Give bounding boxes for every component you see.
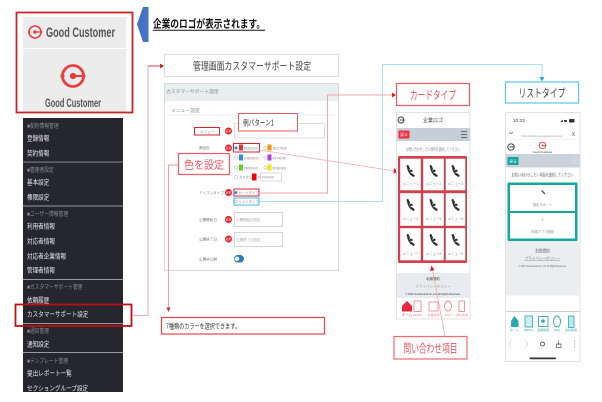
url bar: X (572, 132, 576, 138)
label: list type (506, 82, 578, 103)
note: seven colours: 7種類のカラーを選択できます。 (166, 322, 240, 330)
list menu: Y (541, 218, 544, 222)
side navigation: ■カスタマーサポート管理 (27, 282, 83, 291)
field: colour options: 必須 (226, 146, 232, 150)
callout: set colour (178, 154, 230, 174)
menu grid (398, 156, 467, 263)
bottom nav: 会社情報 (456, 312, 468, 317)
logo wordmark horizontal: Good Customer (46, 24, 115, 40)
footer block: © 2020 Goodsoucell Co.,Ltd. All Rights Reserved. (518, 265, 567, 268)
side navigation: ■テンプレート管理 (27, 356, 69, 365)
field: colour options: FF0000 (262, 176, 274, 180)
field: colour options: #4D9AD2 (244, 156, 259, 160)
field: publish start: 必須 (226, 218, 232, 222)
bottom nav: 会員情報 (537, 327, 549, 332)
menu grid: メニュー3 (448, 182, 463, 186)
icon: logo horizontal (28, 26, 42, 38)
footer block: プライバシーポリシー (525, 256, 561, 260)
menu grid: メニュー5 (426, 217, 441, 221)
bottom nav: 会員情報 (427, 312, 440, 317)
menu grid: メニュー1 (403, 182, 418, 186)
status bar (513, 118, 574, 124)
phone: list type (506, 112, 580, 362)
bottom nav: ホーム (510, 327, 519, 332)
url bar: https://goodcm.sky.goodcustomer.jp (521, 134, 563, 138)
home indicator (530, 358, 556, 359)
side navigation: 契約情報 (27, 148, 50, 158)
field: colour options: #974D9C (272, 156, 287, 160)
list menu: 設定サポート (533, 202, 552, 207)
menu grid: メニュー9 (448, 252, 463, 256)
bottom nav: FAQ (554, 328, 561, 332)
side navigation: 通知設定 (27, 339, 50, 349)
field: icon type: カードタイプ (238, 190, 259, 195)
panel: settings form: メニュー設定 (171, 107, 200, 114)
menu grid: メニュー7 (403, 252, 418, 256)
field: icon type: リストタイプ (238, 199, 259, 204)
callout: pattern example (238, 114, 298, 131)
menu grid: メニュー6 (448, 217, 463, 221)
field: publish start (199, 212, 282, 226)
footer block: 利用規約 (535, 248, 550, 252)
arrow: colour callout to note (166, 165, 178, 312)
field: publish toggle (199, 255, 244, 262)
heading box: admin settings: 管理画面カスタマーサポート設定 (193, 60, 311, 72)
side navigation: 依頼履歴 (27, 295, 50, 305)
arrow: card type option to card label (259, 92, 396, 193)
field: icon type: アイコンタイプ (199, 190, 224, 195)
arrow: list type option to list label (260, 64, 544, 202)
field: publish end: 公開終了日 (199, 236, 217, 242)
field: publish toggle: 公開非公開 (199, 256, 217, 262)
field: publish end: 公開終了日設定... (236, 237, 263, 242)
bottom nav: NEWS (524, 328, 533, 332)
side navigation: ■通知管理 (27, 326, 50, 335)
field: publish end (199, 232, 282, 246)
heading: logo note: 企業のロゴが表示されます。 (153, 16, 265, 30)
label: card type (396, 84, 470, 106)
label: inquiry items: 問い合わせ項目 (404, 342, 458, 356)
list menu (508, 182, 578, 241)
side navigation: 登録情報 (27, 133, 50, 143)
field: publish start: 公開開始日設定... (236, 217, 263, 222)
list menu: 利用アプリ関連 (531, 229, 554, 234)
prompt: お問い合わせしたい項目を選択してください (406, 146, 460, 153)
field: colour options: #EC7A00 (272, 146, 287, 150)
side navigation: ■管理者設定 (27, 165, 54, 174)
field: menu: 必須 (226, 129, 232, 133)
footer block: © 2020 Goodsoucell Co.,Ltd. All Rights Reserved. (406, 292, 461, 296)
logo wordmark stacked: Good Customer (45, 98, 101, 110)
menu grid: メニュー8 (426, 252, 441, 256)
icon: logo stacked (60, 66, 86, 86)
prompt: お問い合わせしたい項目を選択してください (512, 172, 574, 178)
side navigation: ■契約情報管理 (27, 121, 59, 130)
icon: header logo (398, 117, 404, 123)
bottom nav: 会社情報 (565, 327, 577, 332)
bottom nav: NEWS (413, 313, 422, 317)
nav highlight box (16, 304, 132, 326)
field: menu (194, 124, 324, 138)
browser controls (509, 340, 574, 348)
icon: header logos (508, 142, 552, 154)
field: colour options: #F0E000 (272, 166, 286, 170)
field: colour options: 商品色 (199, 145, 210, 150)
menu grid: メニュー4 (403, 217, 418, 221)
footer block (506, 241, 580, 296)
label: card type: カードタイプ (410, 89, 456, 102)
bottom nav: FAQ (445, 313, 452, 317)
callout: pattern example: 例パターン1 (243, 118, 274, 128)
arrow: nav to settings (132, 64, 164, 316)
bottom nav (510, 316, 577, 332)
note: seven colours (162, 318, 324, 334)
side navigation: 利用者情報 (27, 221, 56, 231)
footer block (397, 273, 470, 298)
field: colour options: #E82434 (244, 146, 258, 150)
side navigation: 管理者情報 (27, 265, 56, 275)
footer block: プライバシーポリシー (415, 284, 451, 288)
side navigation: 基本設定 (27, 177, 50, 187)
heading: logo note (153, 16, 265, 30)
field: menu: メニュー (200, 130, 215, 134)
action bar (506, 154, 580, 168)
menu grid: メニュー2 (426, 182, 441, 186)
icon: blue pointer (137, 7, 148, 42)
action bar (397, 128, 470, 141)
panel: settings form (164, 84, 338, 270)
field: icon type (199, 189, 259, 205)
icon: header logos: Good Customer (533, 150, 552, 154)
arrow: colour swatch to card grid (259, 150, 398, 174)
field: colour options: #60D040 (244, 166, 258, 170)
label: inquiry items (394, 336, 467, 359)
heading box: admin settings (164, 54, 338, 76)
field: icon type: 必須 (226, 190, 232, 194)
side navigation: 提出レポート一覧 (27, 368, 72, 378)
side navigation: セクショングループ設定 (27, 383, 89, 393)
field: publish start: 公開開始日 (199, 217, 217, 222)
side navigation (23, 118, 123, 393)
side navigation: 対応者情報 (27, 236, 56, 246)
field: publish end: 必須 (226, 237, 232, 241)
status bar: 10:32 (513, 118, 525, 124)
logo callout (16, 12, 132, 113)
label: list type: リストタイプ (518, 87, 566, 100)
side navigation: カスタマーサポート設定 (27, 309, 89, 319)
side navigation: ■ユーザー情報管理 (27, 209, 69, 218)
header text: 企業ロゴ (423, 117, 443, 124)
panel: settings form: カスタマーサポート設定 (166, 88, 219, 95)
action bar: 戻る (400, 132, 408, 137)
bottom nav (402, 301, 468, 317)
arrow: inquiry label to menu grid (430, 266, 445, 336)
footer block: 利用規約 (426, 276, 440, 281)
side navigation: 対応者企業情報 (27, 251, 67, 261)
callout: set colour: 色を設定 (184, 158, 224, 172)
phone: card type (396, 112, 470, 319)
action bar: 戻る (509, 158, 517, 164)
field: colour options (199, 144, 287, 181)
bottom nav: ホーム (402, 312, 413, 317)
field: colour options: カスタム (239, 174, 253, 180)
field: colour options: # (258, 176, 260, 180)
side navigation: 権限設定 (27, 192, 50, 202)
url bar (506, 132, 579, 140)
